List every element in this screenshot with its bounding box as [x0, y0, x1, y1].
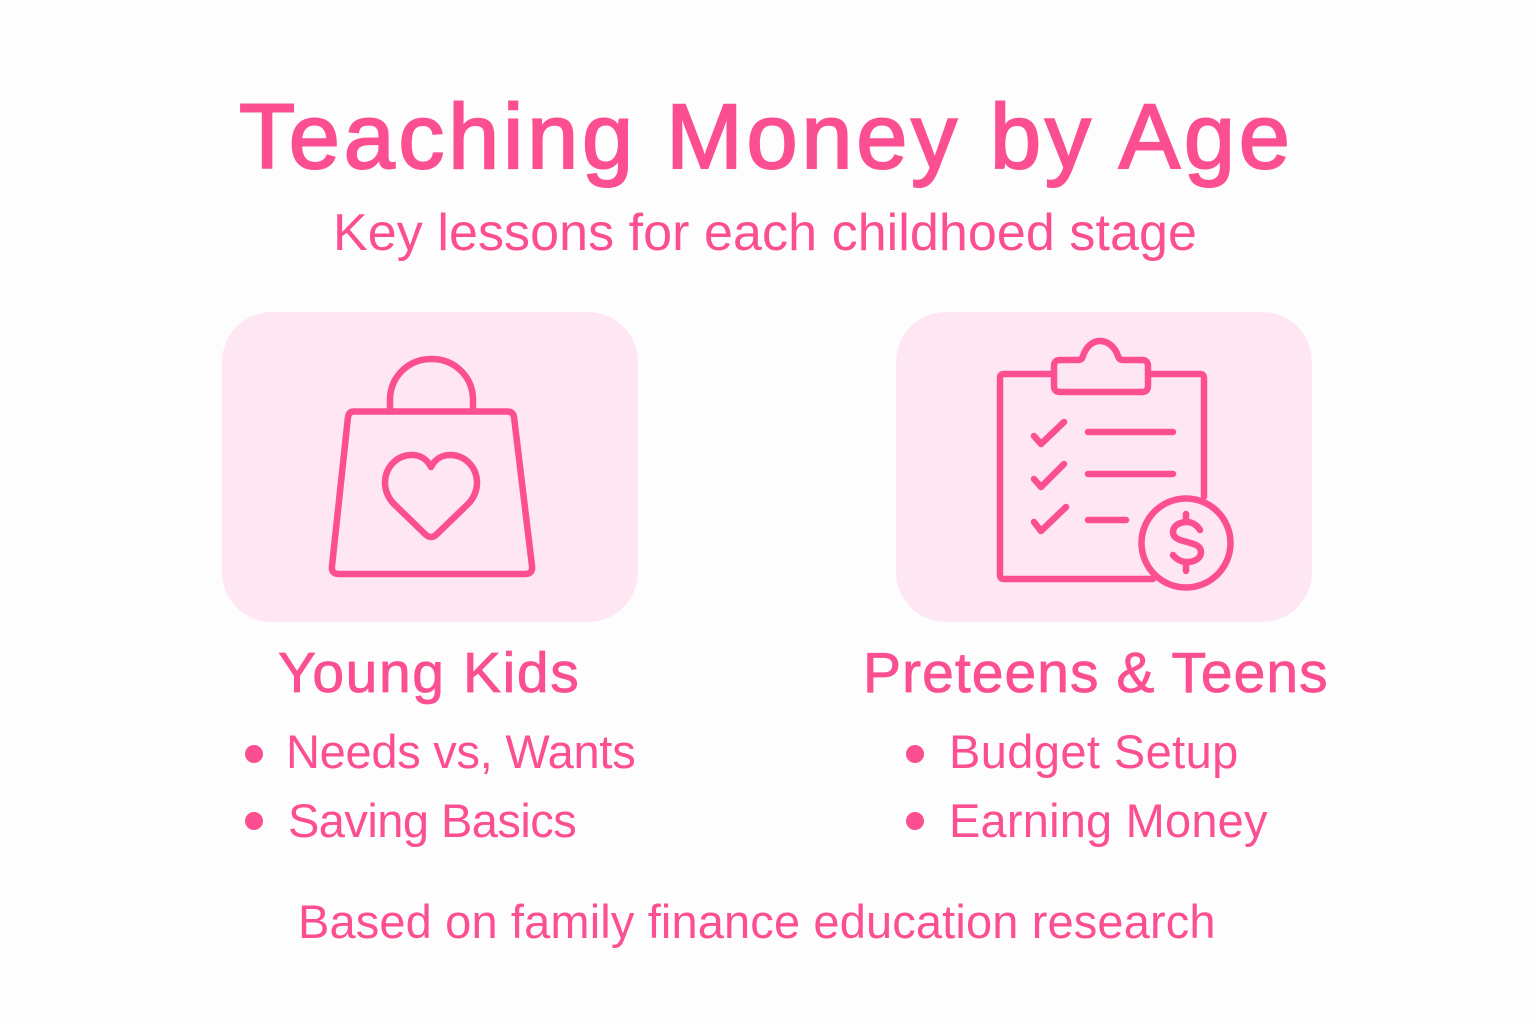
panel: young kids icon card [222, 312, 638, 622]
bullet: budget setup [906, 745, 924, 763]
text: earning money: Earning Money [949, 794, 1268, 847]
text: needs vs wants: Needs vs, Wants [286, 725, 635, 778]
heading: young kids: Young Kids [278, 641, 580, 705]
footer note: Based on family finance education research [298, 895, 1216, 948]
heading: preteens and teens: Preteens & Teens [863, 641, 1329, 705]
bullet: saving basics [245, 812, 263, 830]
text: budget setup: Budget Setup [949, 725, 1239, 778]
bullet: needs vs wants [245, 745, 263, 763]
panel: preteens and teens icon card [896, 312, 1312, 622]
subtitle: Key lessons for each childhoed stage [333, 204, 1197, 262]
text: saving basics: Saving Basics [288, 794, 576, 847]
title: Teaching Money by Age [239, 86, 1294, 188]
bullet: earning money [906, 812, 924, 830]
